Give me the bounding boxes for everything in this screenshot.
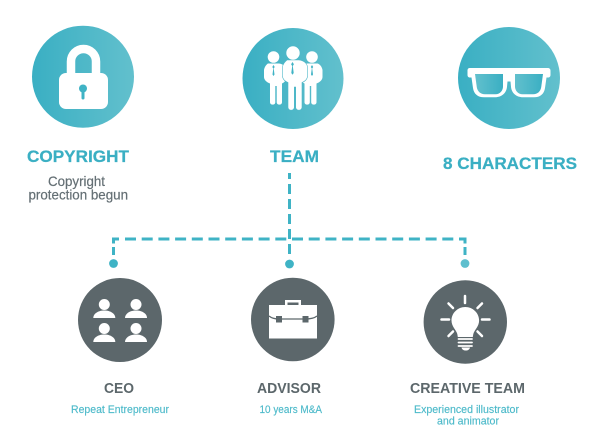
icon: padlock	[32, 26, 134, 128]
panel: 8 characters	[443, 27, 577, 173]
text: creative team description: and animator	[437, 416, 499, 428]
text: copyright description	[28, 173, 128, 202]
panel: CEO	[71, 278, 169, 416]
icon: briefcase	[251, 278, 335, 361]
text: advisor description: 10 years M&A	[260, 404, 323, 416]
text: creative team description: Experienced illustrator	[414, 404, 519, 416]
icon: glasses	[458, 27, 560, 129]
heading: creative team: CREATIVE TEAM	[410, 381, 525, 397]
icon: three businessmen	[242, 28, 344, 129]
heading: CEO: CEO	[104, 381, 134, 397]
panel: copyright	[27, 26, 134, 202]
text: copyright description: Copyright	[48, 173, 105, 189]
text: CEO description: Repeat Entrepreneur	[71, 404, 169, 416]
connector: dashed org lines	[109, 173, 469, 268]
text: creative team description	[414, 404, 519, 428]
text: copyright description: protection begun	[28, 186, 128, 202]
icon: light bulb	[424, 280, 507, 364]
panel: team	[242, 28, 344, 166]
heading: advisor: ADVISOR	[257, 381, 321, 397]
heading: 8 characters: 8 CHARACTERS	[443, 154, 577, 173]
heading: team: TEAM	[270, 147, 319, 166]
panel: advisor	[251, 278, 335, 416]
heading: copyright: COPYRIGHT	[27, 147, 130, 166]
icon: four people	[78, 278, 162, 362]
panel: creative team	[410, 280, 525, 428]
